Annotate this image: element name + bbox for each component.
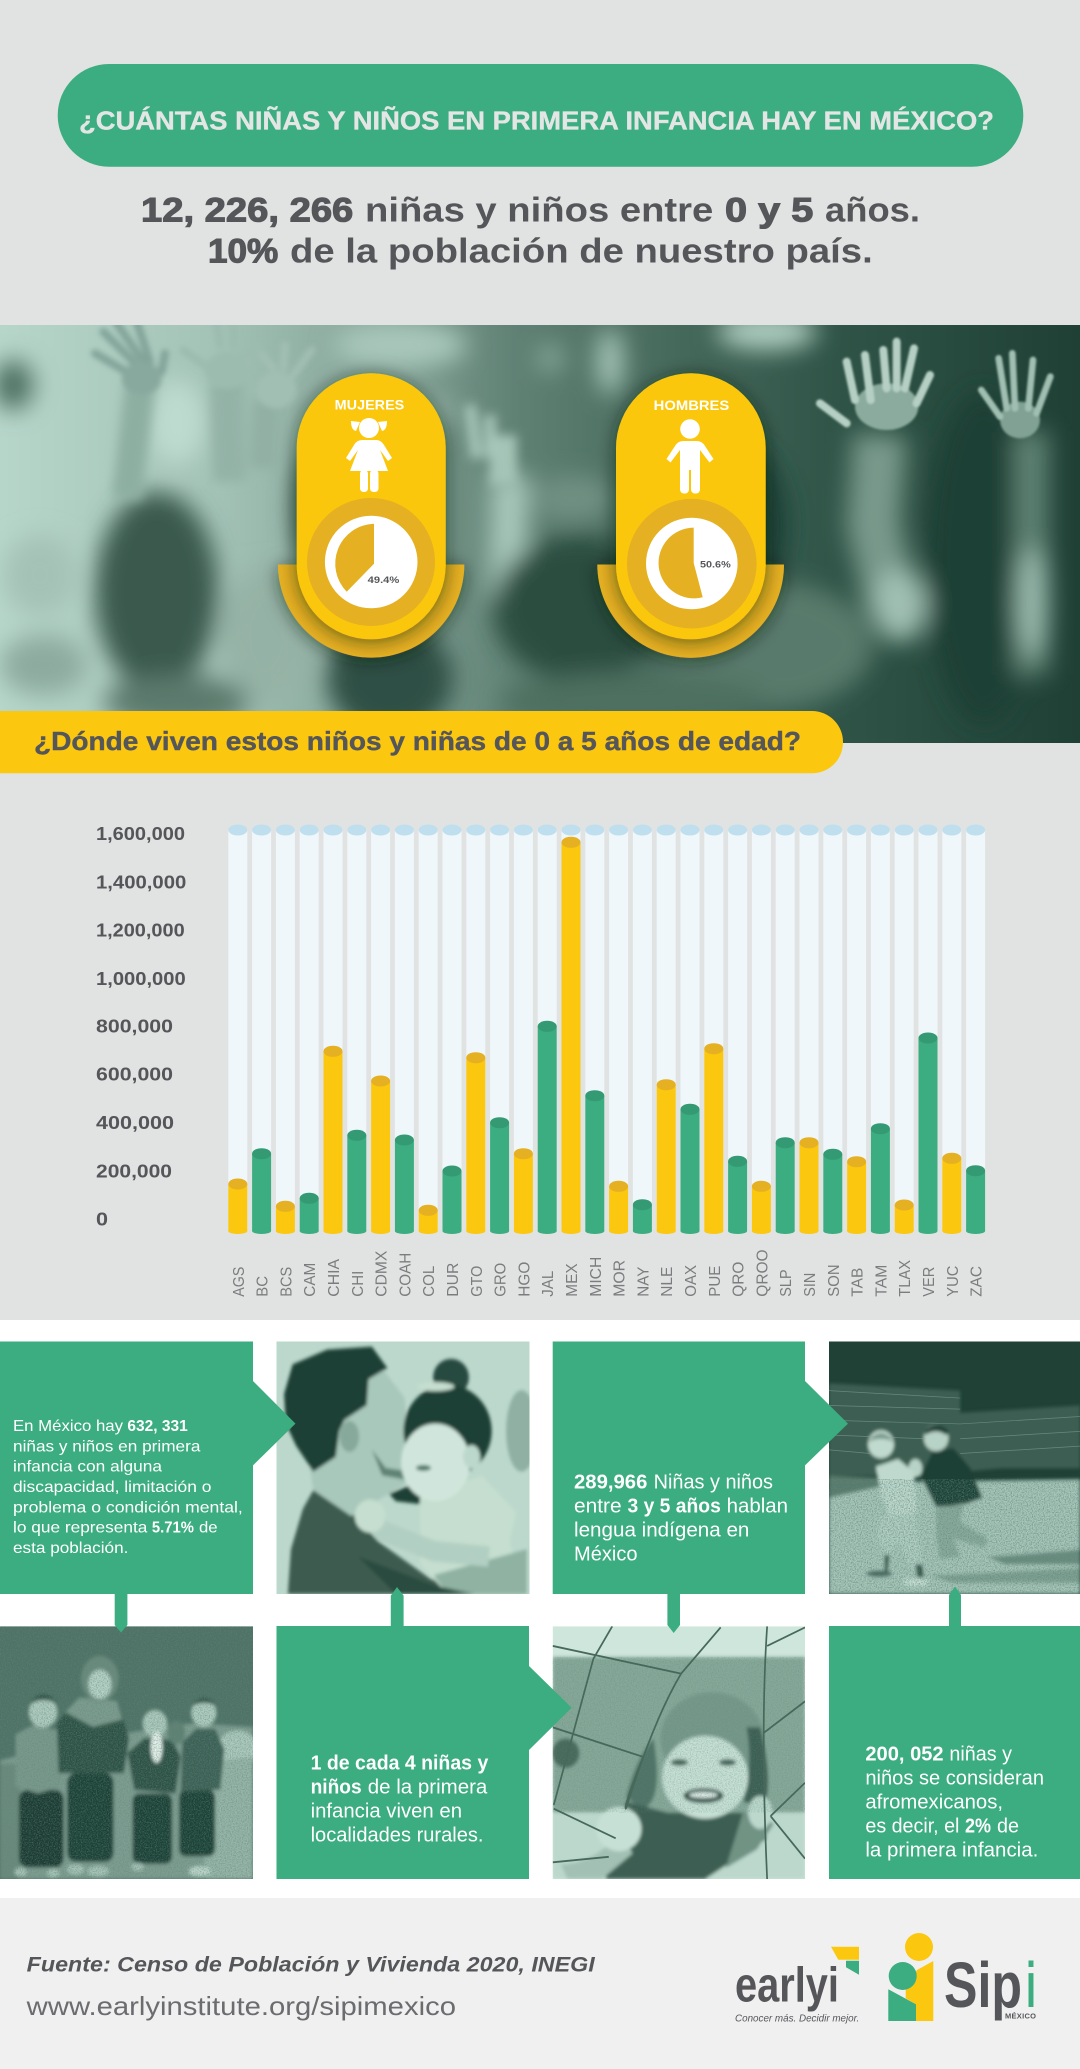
bar: CAM: CAM [302, 1263, 319, 1297]
bar: JAL [538, 824, 557, 1297]
y axis labels: 600,000 [96, 1064, 173, 1085]
text: afromexicanos: de [997, 1815, 1019, 1837]
bar: MICH: MICH [588, 1257, 605, 1297]
headline statistic: 12, 226, 266 [141, 191, 353, 229]
callout box with arrows [0, 1342, 296, 1633]
bar: YUC: YUC [945, 1266, 962, 1297]
bar: CHIA [324, 824, 343, 1297]
heading band: dónde viven [0, 711, 843, 773]
bar: QROO: QROO [754, 1249, 771, 1297]
text: lengua indígena: Niñas y niños [654, 1471, 773, 1493]
headline statistic: años. [825, 191, 920, 229]
bar: AGS: AGS [231, 1267, 248, 1297]
y axis labels [96, 823, 186, 1229]
text: lengua indígena: 3 y 5 años [628, 1495, 721, 1517]
bar: TLAX: TLAX [897, 1260, 914, 1297]
bar: NLE [657, 824, 676, 1297]
text: afromexicanos: 200, 052 [865, 1743, 944, 1765]
text: discapacidad: 5.71% [152, 1520, 194, 1537]
text: lengua indígena: México [574, 1544, 638, 1566]
title banner: ¿CUÁNTAS NIÑAS Y NIÑOS EN PRIMERA INFANCIA HAY EN MÉXICO? [79, 105, 994, 135]
callout box with arrow [829, 1586, 1080, 1879]
text: afromexicanos: 2% [965, 1815, 991, 1837]
text: rurales: localidades rurales. [311, 1825, 484, 1847]
bar: SLP [776, 824, 795, 1297]
text: rurales: 1 de cada 4 niñas y [311, 1752, 489, 1774]
text: discapacidad: En México hay [13, 1418, 123, 1435]
bar: CAM [300, 824, 319, 1297]
panel: afromexicanos [829, 1586, 1080, 1879]
bar: GTO: GTO [469, 1266, 486, 1297]
photo: father kissing baby [276, 1342, 530, 1594]
text: afromexicanos: la primera infancia. [865, 1839, 1038, 1861]
panel: hombres [597, 373, 784, 658]
logo: sipi: i [1026, 1949, 1036, 2021]
logo: sipi [888, 1933, 1036, 2021]
text: discapacidad [13, 1418, 243, 1557]
photo: girl in climbing net [552, 1626, 805, 1879]
website url: www.earlyinstitute.org/sipimexico [26, 1991, 456, 2021]
text: lengua indígena: hablan [727, 1495, 788, 1517]
bar: GRO [490, 824, 510, 1297]
logo: earlyi: earlyi [735, 1959, 839, 2013]
bar: VER [918, 824, 938, 1297]
bar: PUE [704, 824, 724, 1297]
text: rurales: de la primera [368, 1776, 488, 1798]
text: lengua indígena: 289,966 [574, 1471, 647, 1493]
bar: MOR [609, 824, 629, 1297]
bar: QRO: QRO [731, 1262, 748, 1297]
heading band: dónde viven: ¿Dónde viven estos niños y niñas de 0 a 5 años de edad? [34, 726, 801, 756]
bar: OAX [680, 824, 700, 1297]
headline statistic [141, 191, 920, 270]
bar chart: children by state [96, 823, 986, 1297]
bar: TAM [871, 824, 890, 1297]
headline statistic: 0 y 5 [725, 191, 813, 229]
text: discapacidad: discapacidad, limitación o [13, 1479, 212, 1496]
bar: SLP: SLP [778, 1269, 795, 1297]
panel: discapacidad [0, 1342, 296, 1633]
bar: MEX: MEX [564, 1263, 581, 1297]
bar: TLAX [895, 824, 914, 1297]
pie chart: 49.4%: 49.4% [368, 575, 400, 586]
bar: CDMX: CDMX [374, 1250, 391, 1297]
bar: COL: COL [421, 1266, 438, 1297]
y axis labels: 200,000 [96, 1160, 172, 1181]
text: discapacidad: esta población. [13, 1540, 128, 1557]
y axis labels: 800,000 [96, 1016, 173, 1037]
source citation: Fuente: Censo de Población y Vivienda 2020, INEGI [27, 1954, 596, 1977]
logo: sipi: Sip [944, 1949, 1022, 2021]
pie chart: 50.6% [627, 499, 757, 628]
photo: group of children [0, 1626, 253, 1879]
bar: NAY: NAY [635, 1266, 652, 1297]
y axis labels: 1,600,000 [96, 823, 185, 844]
bar: MICH [585, 824, 605, 1297]
headline statistic: 10% [208, 232, 278, 270]
text: rurales: niños [311, 1776, 362, 1798]
text: afromexicanos: es decir, el [865, 1815, 959, 1837]
bar: ZAC [966, 824, 986, 1297]
bar: JAL: JAL [540, 1271, 557, 1297]
headline statistic: de la población de nuestro país. [290, 232, 873, 270]
bar: SIN: SIN [802, 1273, 819, 1297]
bar: QROO [752, 824, 771, 1297]
bar: TAB [847, 824, 867, 1297]
bar: TAB: TAB [850, 1268, 867, 1297]
hero photo: raised hands [0, 313, 1080, 743]
bar: HGO [514, 824, 533, 1297]
bar: SON: SON [826, 1264, 843, 1297]
text: discapacidad: infancia con alguna [13, 1459, 162, 1476]
bar: NAY [633, 824, 652, 1297]
y axis labels: 1,200,000 [96, 920, 185, 941]
bar: GRO: GRO [493, 1263, 510, 1297]
panel: localidades rurales [276, 1587, 572, 1879]
bar: CHI [347, 824, 367, 1297]
icon: boy [666, 419, 714, 494]
y axis labels: 1,400,000 [96, 871, 186, 892]
text: lengua indígena: entre [574, 1495, 622, 1517]
bar: BC [252, 824, 272, 1297]
bar: PUE: PUE [707, 1266, 724, 1297]
label: hombres: HOMBRES [654, 397, 729, 413]
page background [0, 0, 1080, 1320]
y axis labels: 1,000,000 [96, 968, 186, 989]
bar: AGS [228, 824, 248, 1297]
bar: CDMX [371, 824, 391, 1297]
bar: CHI: CHI [350, 1271, 367, 1297]
bar: COAH [395, 824, 414, 1297]
label: mujeres: MUJERES [335, 396, 404, 412]
bar: ZAC: ZAC [969, 1266, 986, 1297]
text: discapacidad: 632, 331 [127, 1418, 188, 1435]
bar: BCS: BCS [278, 1267, 295, 1297]
panel: lengua indígena [553, 1342, 848, 1633]
logo: earlyi: Conocer más. Decidir mejor. [735, 2013, 859, 2025]
y axis labels: 0 [96, 1208, 108, 1229]
callout box with arrows [276, 1587, 572, 1879]
title banner [58, 64, 1023, 167]
text: discapacidad: niñas y niños en primera [13, 1438, 201, 1455]
y axis labels: 400,000 [96, 1112, 174, 1133]
capsule [616, 373, 766, 639]
headline statistic: niñas y niños entre [365, 191, 713, 229]
capsule [297, 373, 446, 639]
bar: COL [419, 824, 438, 1297]
callout box with arrows [553, 1342, 848, 1633]
pie chart: 50.6%: 50.6% [700, 560, 731, 571]
bar: BC: BC [255, 1276, 272, 1297]
text: discapacidad: lo que representa [13, 1520, 148, 1537]
text: discapacidad: de [199, 1520, 218, 1537]
bar: MOR: MOR [612, 1260, 629, 1297]
text: lengua indígena [574, 1471, 788, 1566]
bar: DUR [442, 824, 462, 1297]
bar: SIN [800, 824, 819, 1297]
pie chart: 49.4% [307, 498, 435, 626]
text: rurales: infancia viven en [311, 1801, 462, 1823]
text: afromexicanos: niños se consideran [865, 1767, 1044, 1789]
bar: SON [823, 824, 843, 1297]
bar: VER: VER [921, 1267, 938, 1297]
text: afromexicanos [865, 1743, 1044, 1861]
bar: NLE: NLE [659, 1267, 676, 1297]
bar: BCS [276, 824, 295, 1297]
text: lengua indígena: lengua indígena en [574, 1519, 749, 1541]
logo: earlyi [735, 1947, 859, 2025]
bar: YUC [942, 824, 962, 1297]
bar: HGO: HGO [516, 1262, 533, 1297]
bar: QRO [728, 824, 748, 1297]
panel: mujeres [278, 373, 464, 658]
bar: COAH: COAH [397, 1253, 414, 1297]
bar: MEX [562, 824, 581, 1297]
bar: GTO [466, 824, 486, 1297]
logo: sipi: MÉXICO [1005, 2011, 1036, 2020]
bar: TAM: TAM [873, 1265, 890, 1297]
text: rurales [311, 1752, 489, 1847]
photo: two boys running [829, 1342, 1080, 1594]
text: afromexicanos: niñas y [949, 1743, 1012, 1765]
base half disc [278, 564, 464, 658]
base half disc [597, 564, 784, 658]
icon: girl [346, 418, 392, 492]
bar: DUR: DUR [445, 1263, 462, 1297]
text: afromexicanos: afromexicanos, [865, 1791, 1003, 1813]
bar: CHIA: CHIA [326, 1259, 343, 1297]
bar: OAX: OAX [683, 1265, 700, 1297]
text: discapacidad: problema o condición mental, [13, 1499, 243, 1516]
